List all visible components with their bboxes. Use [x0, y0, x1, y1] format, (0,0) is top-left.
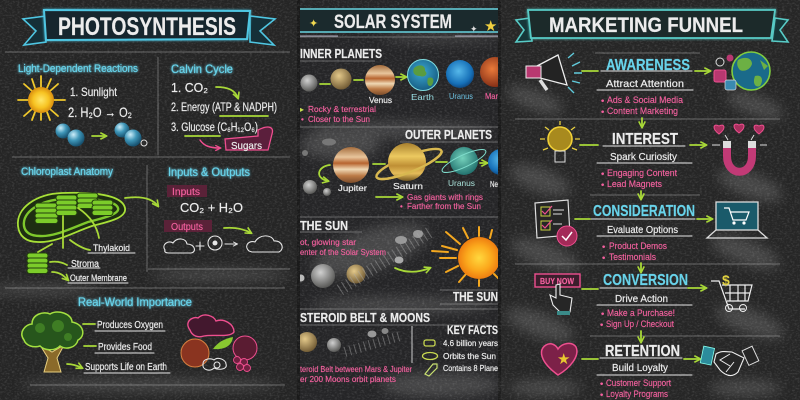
sun description: enter of the Solar System — [300, 247, 386, 257]
stage: awareness: Content Marketing — [607, 106, 678, 117]
stage: conversion: Drive Action — [615, 294, 668, 305]
stage: retention: RETENTION — [605, 343, 680, 360]
icon: buy now button — [535, 274, 580, 315]
stage: awareness: • — [601, 107, 604, 118]
sun description: ot, glowing star — [300, 237, 356, 247]
outer planet facts — [375, 193, 483, 210]
chloroplast labels: Stroma — [71, 259, 99, 270]
list: sunlight and water: 2. H₂O → O₂ — [68, 104, 132, 120]
icon: checklist — [535, 200, 577, 246]
icon: magnet with hearts — [712, 124, 767, 172]
outer planet labels: Uranus — [448, 178, 475, 188]
heading: asteroid belt and moons: STEROID BELT & MOONS — [300, 310, 430, 325]
title banner: photosynthesis: PHOTOSYNTHESIS — [58, 13, 236, 41]
inner planet facts: • — [301, 115, 304, 124]
icon: buy now button: BUY NOW — [540, 277, 574, 286]
list: calvin cycle steps: 2. Energy (ATP & NADPH) — [171, 102, 277, 114]
asteroid belt illustration — [297, 326, 412, 363]
icon: laptop with cart — [707, 202, 767, 238]
benefits list: Provides Food — [98, 342, 152, 353]
arrows: consideration — [575, 218, 712, 220]
icon: handshake — [700, 346, 759, 376]
heading: the sun: THE SUN — [300, 218, 348, 233]
stage: awareness: Ads & Social Media — [607, 95, 684, 106]
outer planet labels: Ne — [490, 179, 498, 189]
callout: sugars: Sugars — [231, 140, 262, 152]
stage: awareness: AWARENESS — [606, 57, 690, 74]
chloroplast labels — [68, 243, 135, 283]
stage: conversion: Sign Up / Checkout — [606, 319, 674, 330]
heading: inputs and outputs: Inputs & Outputs — [168, 165, 250, 179]
stage: retention: • — [600, 379, 603, 390]
title banner: solar system — [300, 9, 498, 36]
key facts: KEY FACTS — [447, 323, 498, 337]
outputs label: Outputs — [171, 222, 203, 233]
arrows: conversion — [582, 288, 706, 289]
title banner: solar system: ✦ — [470, 24, 478, 34]
arrow: inputs to equation — [125, 197, 158, 206]
benefits list — [67, 320, 170, 373]
benefits list: Produces Oxygen — [97, 320, 163, 331]
outer planet facts: Farther from the Sun — [407, 201, 481, 211]
stage: awareness: • — [601, 96, 604, 107]
list: calvin cycle steps: 3. Glucose (C₆H₁₂O₆) — [171, 122, 258, 134]
icon: shopping cart: $ — [722, 272, 730, 288]
inputs label — [167, 185, 207, 198]
callout: sugars — [200, 127, 272, 152]
panel: marketing funnel — [516, 10, 788, 400]
icon: output molecules — [164, 236, 282, 253]
stage: retention — [597, 343, 692, 400]
stage: conversion: • — [601, 309, 604, 320]
title banner: solar system: ✦ — [309, 18, 318, 30]
icon: sun — [18, 76, 65, 120]
inner planet labels: Earth — [411, 92, 434, 102]
sun description — [300, 237, 386, 257]
inner planet labels: Venus — [369, 95, 392, 105]
inner planet labels — [368, 92, 498, 104]
list: sunlight and water — [68, 85, 132, 120]
heading: real-world importance: Real-World Importance — [78, 295, 192, 309]
inner planet labels: Uranus — [449, 91, 473, 101]
stage: consideration: Product Demos — [609, 241, 667, 252]
arrows: awareness — [582, 70, 710, 72]
title banner: marketing funnel — [516, 10, 788, 42]
key facts — [422, 323, 498, 376]
title banner: solar system: SOLAR SYSTEM — [334, 12, 452, 33]
inner planet facts: ▸ — [300, 105, 304, 114]
list: sunlight and water: 1. Sunlight — [70, 85, 118, 99]
icon: light bulb — [540, 121, 580, 162]
icon: shopping cart — [711, 272, 752, 312]
stage: awareness — [597, 57, 693, 127]
arrow: outputs — [224, 228, 251, 233]
stage: interest: • — [601, 180, 604, 191]
stage: retention: Customer Support — [606, 378, 671, 389]
stage: consideration: • — [602, 253, 605, 264]
asteroids near sun — [298, 230, 430, 290]
key facts: 4.6 billion years — [443, 338, 498, 348]
stage: retention: Build Loyalty — [612, 363, 668, 374]
stage: interest: Spark Curiosity — [610, 152, 677, 163]
stage: consideration: Testimonials — [609, 252, 656, 263]
outer planet facts: • — [400, 202, 403, 211]
equation: inputs: CO₂ + H₂O — [180, 200, 243, 215]
stage: interest: Lead Magnets — [607, 179, 662, 190]
stage: consideration — [590, 203, 695, 272]
heading: inner planets: INNER PLANETS — [300, 46, 382, 61]
title banner: photosynthesis — [23, 10, 275, 45]
stage: awareness: Attract Attention — [606, 79, 684, 90]
icon: water molecules — [56, 122, 147, 146]
outer planet labels: Saturn — [393, 181, 423, 191]
stage: interest: INTEREST — [612, 131, 678, 148]
icon: heart with star — [542, 343, 577, 375]
chloroplast labels: Thylakoid — [93, 243, 130, 254]
label: the sun: THE SUN — [453, 289, 498, 304]
heading: light-dependent reactions: Light-Dependent Reactions — [18, 63, 138, 75]
inner planets row — [300, 57, 510, 95]
asteroid belt description: teroid Belt between Mars & Jupiter — [300, 365, 412, 374]
stage: consideration: • — [602, 242, 605, 253]
stage: conversion: Make a Purchase! — [607, 308, 675, 319]
icon: social globe — [714, 52, 770, 90]
title banner: solar system: ★ — [484, 18, 497, 35]
icon: megaphone — [526, 53, 582, 93]
heading: calvin cycle: Calvin Cycle — [171, 62, 233, 76]
heading: outer planets: OUTER PLANETS — [405, 127, 492, 142]
panel: solar system — [297, 9, 514, 384]
inner planet labels: Mar — [485, 91, 498, 101]
stage: interest — [597, 131, 692, 199]
benefits list: Supports Life on Earth — [85, 362, 167, 373]
key facts: Orbits the Sun — [443, 351, 496, 361]
icon: heart with star: ★ — [557, 351, 570, 368]
icon: the sun — [432, 227, 500, 286]
outputs label — [164, 220, 212, 233]
list: calvin cycle steps: 1. CO₂ — [171, 80, 208, 95]
inner planet facts: Rocky & terrestrial — [308, 104, 376, 114]
diagram: chloroplast — [18, 193, 125, 280]
inner planet facts: Closer to the Sun — [308, 114, 370, 124]
stage: interest: • — [601, 169, 604, 180]
arrows: interest — [580, 144, 706, 146]
stage: conversion — [597, 272, 692, 342]
title banner: marketing funnel: MARKETING FUNNEL — [549, 14, 743, 37]
heading: chloroplast anatomy: Chloroplast Anatomy — [21, 166, 113, 178]
stage: conversion: • — [600, 320, 603, 331]
stage: interest: Engaging Content — [607, 168, 677, 179]
inputs label: Inputs — [172, 187, 200, 198]
chloroplast labels: Outer Membrane — [70, 273, 127, 283]
panel: photosynthesis — [18, 10, 282, 373]
icon: food — [181, 315, 257, 372]
stage: conversion: CONVERSION — [603, 272, 688, 289]
arrows: retention — [582, 358, 700, 360]
stage: consideration: CONSIDERATION — [593, 203, 695, 220]
icon: tree — [22, 312, 83, 372]
list: calvin cycle steps — [171, 80, 277, 136]
key facts: Contains 8 Plane — [443, 363, 498, 373]
outer planets row — [302, 138, 514, 196]
asteroid belt description — [300, 365, 412, 384]
outer planet labels — [338, 180, 498, 193]
inner planet facts — [300, 106, 376, 122]
outer planet labels: Jupiter — [338, 183, 367, 193]
asteroid belt description: er 200 Moons orbit planets — [300, 375, 396, 384]
stage: consideration: Evaluate Options — [607, 225, 678, 236]
stage: retention: Loyalty Programs — [606, 389, 668, 400]
outer planet facts: Gas giants with rings — [407, 192, 483, 202]
